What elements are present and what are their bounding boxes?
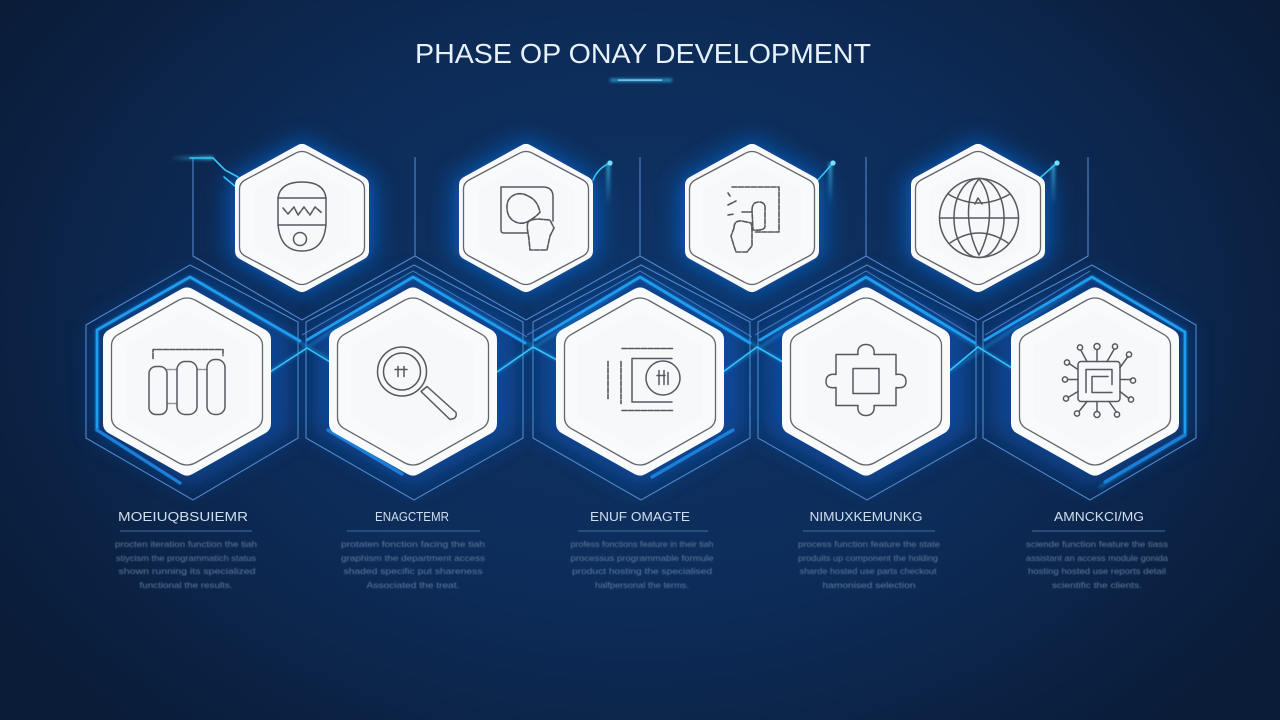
cyan glowing circuit lines: [97, 277, 1185, 487]
text block: column 3: [570, 509, 714, 590]
text block: column 2: [341, 509, 485, 590]
icon: puzzle piece: [826, 344, 906, 416]
hexagon: top 3 with component icon: [690, 152, 814, 284]
cyan accent: top hexagon 3: [818, 160, 836, 205]
zigzag connector frame behind top hexagons: [193, 157, 1088, 320]
title underline accent: [610, 79, 672, 81]
hexagon: top 2 with gears icon: [464, 152, 588, 284]
hexagon: bottom 5 with chip icon: [1020, 298, 1170, 465]
text block: column 1: stiycism the programmatich status: [116, 553, 256, 563]
text block: column 2: graphism the department access: [341, 553, 485, 563]
text block: column 5: assistant an access module gonida: [1026, 553, 1168, 563]
second inner thin frame lines: [302, 271, 1090, 337]
hexagon: top 4 with globe icon: [916, 152, 1040, 284]
icon: visor head: [278, 182, 326, 251]
text block: column 2: protaten fonction facing the tiah: [341, 539, 485, 549]
blue glow behind hexagons: [94, 140, 1188, 488]
text block: column 5: hosting hosted use reports detail: [1028, 566, 1166, 576]
hexagon: bottom 4 with puzzle icon: [790, 298, 942, 465]
text block: column 5: AMNCKCI/MG: [1054, 509, 1144, 524]
text block: column 5: scientific the clients.: [1052, 580, 1142, 590]
icon: circuit chip: [1062, 344, 1136, 418]
text block: column 1: [115, 509, 257, 590]
text block: column 4: sharde hosted use parts checkout: [800, 566, 937, 576]
title: PHASE OP ONAY DEVELOPMENT: [415, 38, 871, 69]
icon: frame and two gears: [501, 187, 554, 250]
text block: column 1: procten iteration function the tiah: [115, 539, 257, 549]
icon: three cylinders: [149, 350, 225, 414]
icon: frame with blobs: [728, 187, 779, 252]
text block: column 4: produits up component the holding: [798, 553, 938, 563]
text block: column 1: MOEIUQBSUIEMR: [118, 509, 248, 524]
text block: column 5: sciende function feature the tiass: [1026, 539, 1168, 549]
icon: magnifier: [378, 347, 456, 420]
text block: column 4: NIMUXKEMUNKG: [810, 509, 922, 524]
icon: globe: [940, 178, 1018, 258]
hexagon: top 1 with visor head icon: [240, 152, 364, 284]
outer thin hexagon frames: [86, 265, 1196, 500]
text block: column 3: halfpersonal the terms.: [595, 580, 689, 590]
text block: column 2: shaded specific put shareness: [344, 566, 482, 576]
icon: frame with circle and dotted labels: [608, 348, 680, 410]
text block: column 3: product hosting the specialised: [572, 566, 712, 576]
text block: column 4: process function feature the state: [798, 539, 940, 549]
hexagon: bottom 3 with diagram icon: [564, 298, 716, 465]
text block: column 3: processus programmable formule: [570, 553, 714, 563]
hexagon: bottom 2 with magnifier icon: [338, 298, 488, 465]
text block: column 2: ENAGCTEMR: [375, 509, 449, 524]
hexagon: bottom 1 with cylinders icon: [112, 298, 262, 465]
cyan accent: top hexagon 4: [1041, 160, 1060, 205]
cyan accent: top hexagon 2: [593, 160, 613, 205]
text block: column 4: hamonised selection: [822, 580, 916, 590]
text block: column 1: functional the results.: [140, 580, 232, 590]
cyan accent: top hexagon 1: [170, 156, 238, 187]
text block: column 3: ENUF OMAGTE: [590, 509, 690, 524]
text block: column 1: shown running its specialized: [118, 566, 256, 576]
text block: column 2: Associated the treat.: [366, 580, 460, 590]
text block: column 5: [1026, 509, 1168, 590]
text block: column 3: profess fonctions feature in their tiah: [570, 539, 714, 549]
text block: column 4: [798, 509, 940, 590]
